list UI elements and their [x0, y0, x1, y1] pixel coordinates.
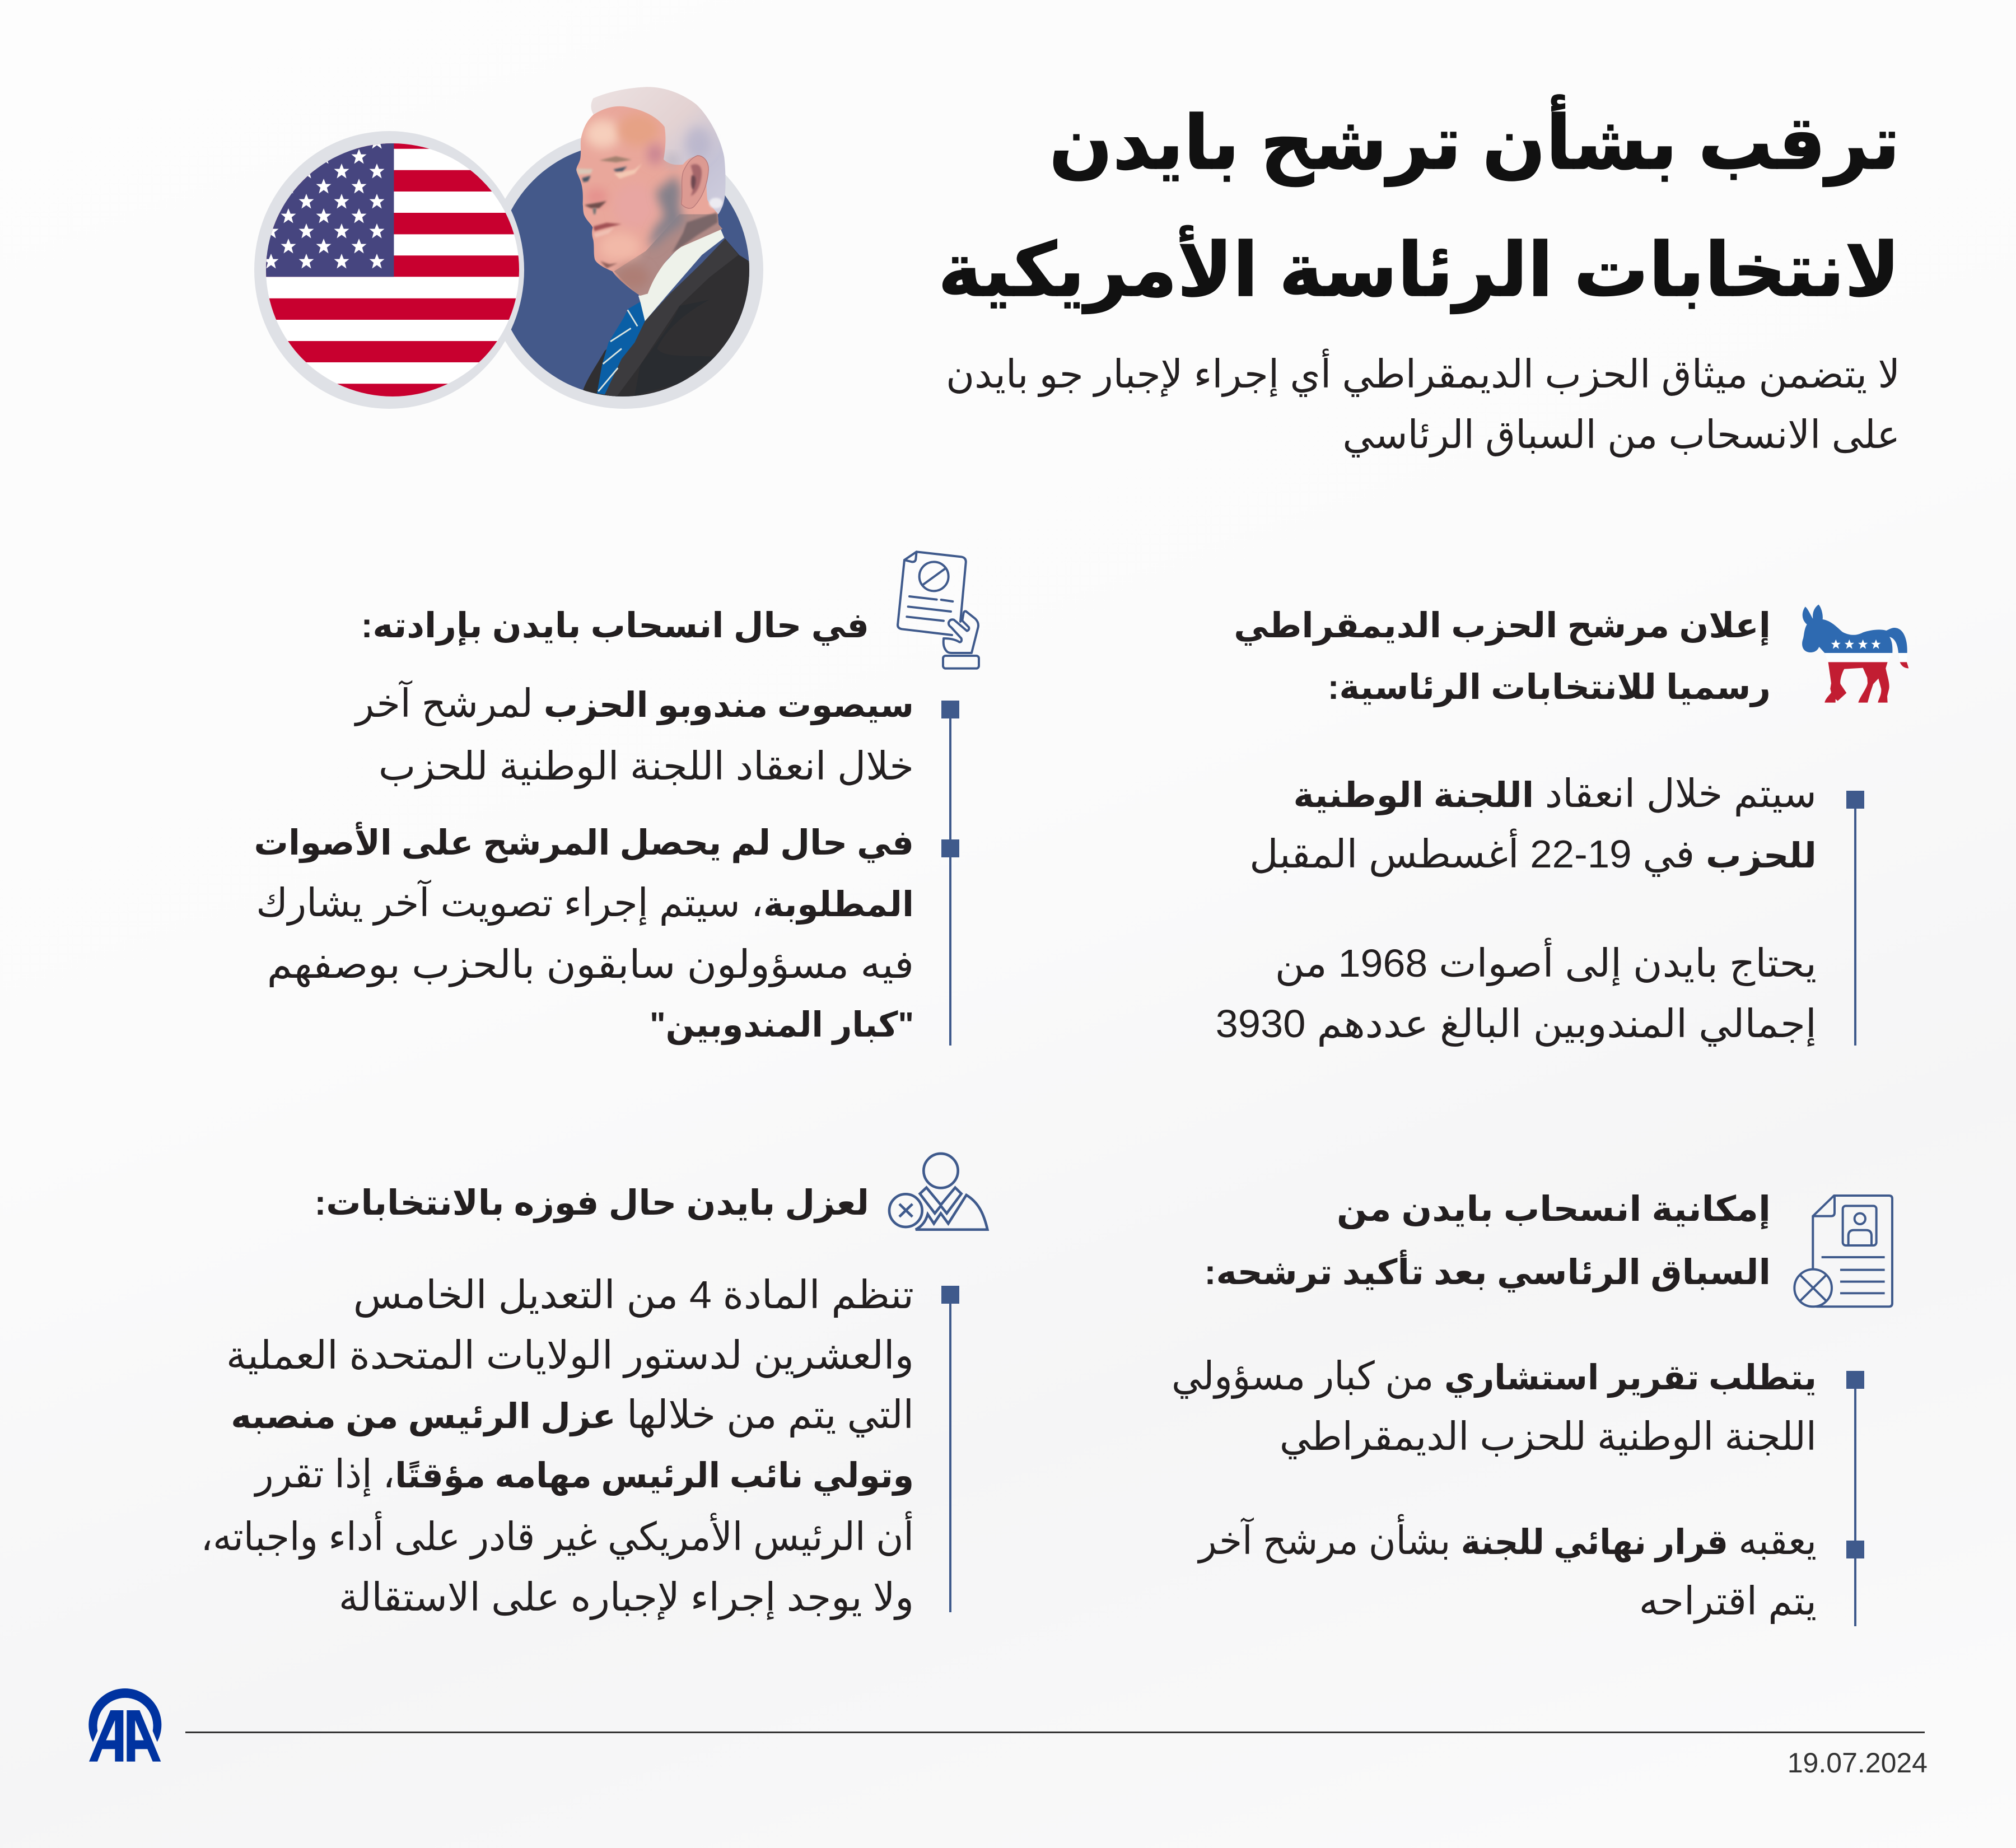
heading: possibility of withdrawal: إمكانية انسحاب بايدن من [1337, 1190, 1771, 1229]
text: advisory report and committee decision: يتم اقتراحه [1639, 1579, 1817, 1623]
icon: person with cross [888, 1152, 989, 1231]
text: convention dates and delegates: يحتاج بايدن إلى أصوات 1968 من [1275, 941, 1817, 985]
heading: official nomination [1234, 606, 1771, 708]
text: convention dates and delegates [1216, 772, 1817, 1047]
portrait and flag illustration [254, 87, 763, 409]
icon: resume with cross [1793, 1194, 1893, 1308]
icon: document in hand [897, 550, 980, 670]
text: convention dates and delegates: للحزب في 19-22 أغسطس المقبل [1249, 832, 1817, 876]
text: convention dates and delegates: إجمالي المندوبين البالغ عددهم 3930 [1216, 1002, 1817, 1046]
text: advisory report and committee decision: اللجنة الوطنية للحزب الديمقراطي [1280, 1415, 1817, 1458]
text: advisory report and committee decision [1172, 1354, 1817, 1624]
title [938, 94, 1900, 315]
title: ترقب بشأن ترشح بايدن [1049, 102, 1900, 185]
timeline: nomination [1846, 791, 1864, 1046]
logo: Anadolu Agency [88, 1688, 161, 1762]
timeline: removal [941, 1286, 959, 1612]
text: twenty-fifth amendment: التي يتم من خلالها عزل الرئيس من منصبه [231, 1393, 914, 1436]
text: advisory report and committee decision: يتطلب تقرير استشاري من كبار مسؤولي [1172, 1354, 1817, 1398]
text: twenty-fifth amendment: وتولي نائب الرئيس مهامه مؤقتًا، إذا تقرر [255, 1452, 914, 1496]
heading: possibility of withdrawal: السباق الرئاسي بعد تأكيد ترشحه: [1205, 1253, 1771, 1292]
text: voluntary withdrawal procedure: سيصوت مندوبو الحزب لمرشح آخر [356, 682, 914, 725]
title: لانتخابات الرئاسة الأمريكية [938, 229, 1900, 312]
text: voluntary withdrawal procedure: "كبار المندوبين" [650, 1006, 914, 1044]
text: voluntary withdrawal procedure [254, 680, 914, 1045]
text: twenty-fifth amendment: ولا يوجد إجراء لإجباره على الاستقالة [339, 1575, 914, 1619]
subtitle: على الانسحاب من السباق الرئاسي [1342, 413, 1900, 456]
heading: voluntary withdrawal: في حال انسحاب بايدن بإرادته: [361, 606, 869, 645]
text: voluntary withdrawal procedure: المطلوبة، سيتم إجراء تصويت آخر يشارك [256, 881, 914, 925]
icon: democratic donkey [1802, 605, 1908, 703]
date: 19.07.2024 [1788, 1747, 1928, 1779]
text: voluntary withdrawal procedure: فيه مسؤولون سابقون بالحزب بوصفهم [267, 942, 914, 986]
text: twenty-fifth amendment: تنظم المادة 4 من التعديل الخامس [353, 1273, 914, 1317]
text: voluntary withdrawal procedure: في حال لم يحصل المرشح على الأصوات [254, 824, 914, 862]
text: twenty-fifth amendment [201, 1273, 914, 1620]
heading: official nomination: إعلان مرشح الحزب الديمقراطي [1234, 606, 1771, 645]
subtitle: لا يتضمن ميثاق الحزب الديمقراطي أي إجراء لإجبار جو بايدن [946, 352, 1900, 396]
text: voluntary withdrawal procedure: خلال انعقاد اللجنة الوطنية للحزب [379, 744, 914, 788]
text: twenty-fifth amendment: أن الرئيس الأمريكي غير قادر على أداء واجباته، [201, 1515, 914, 1558]
timeline: possibility of withdrawal [1846, 1371, 1864, 1626]
heading: official nomination: رسميا للانتخابات الرئاسية: [1328, 668, 1771, 707]
subtitle [946, 348, 1900, 458]
heading: possibility of withdrawal [1205, 1190, 1771, 1292]
heading: removal after election: لعزل بايدن حال فوزه بالانتخابات: [315, 1184, 869, 1222]
timeline: voluntary withdrawal [941, 701, 959, 1046]
text: advisory report and committee decision: يعقبه قرار نهائي للجنة بشأن مرشح آخر [1199, 1519, 1817, 1562]
text: twenty-fifth amendment: والعشرين لدستور الولايات المتحدة العملية [226, 1333, 914, 1377]
text: convention dates and delegates: سيتم خلال انعقاد اللجنة الوطنية [1293, 772, 1817, 815]
